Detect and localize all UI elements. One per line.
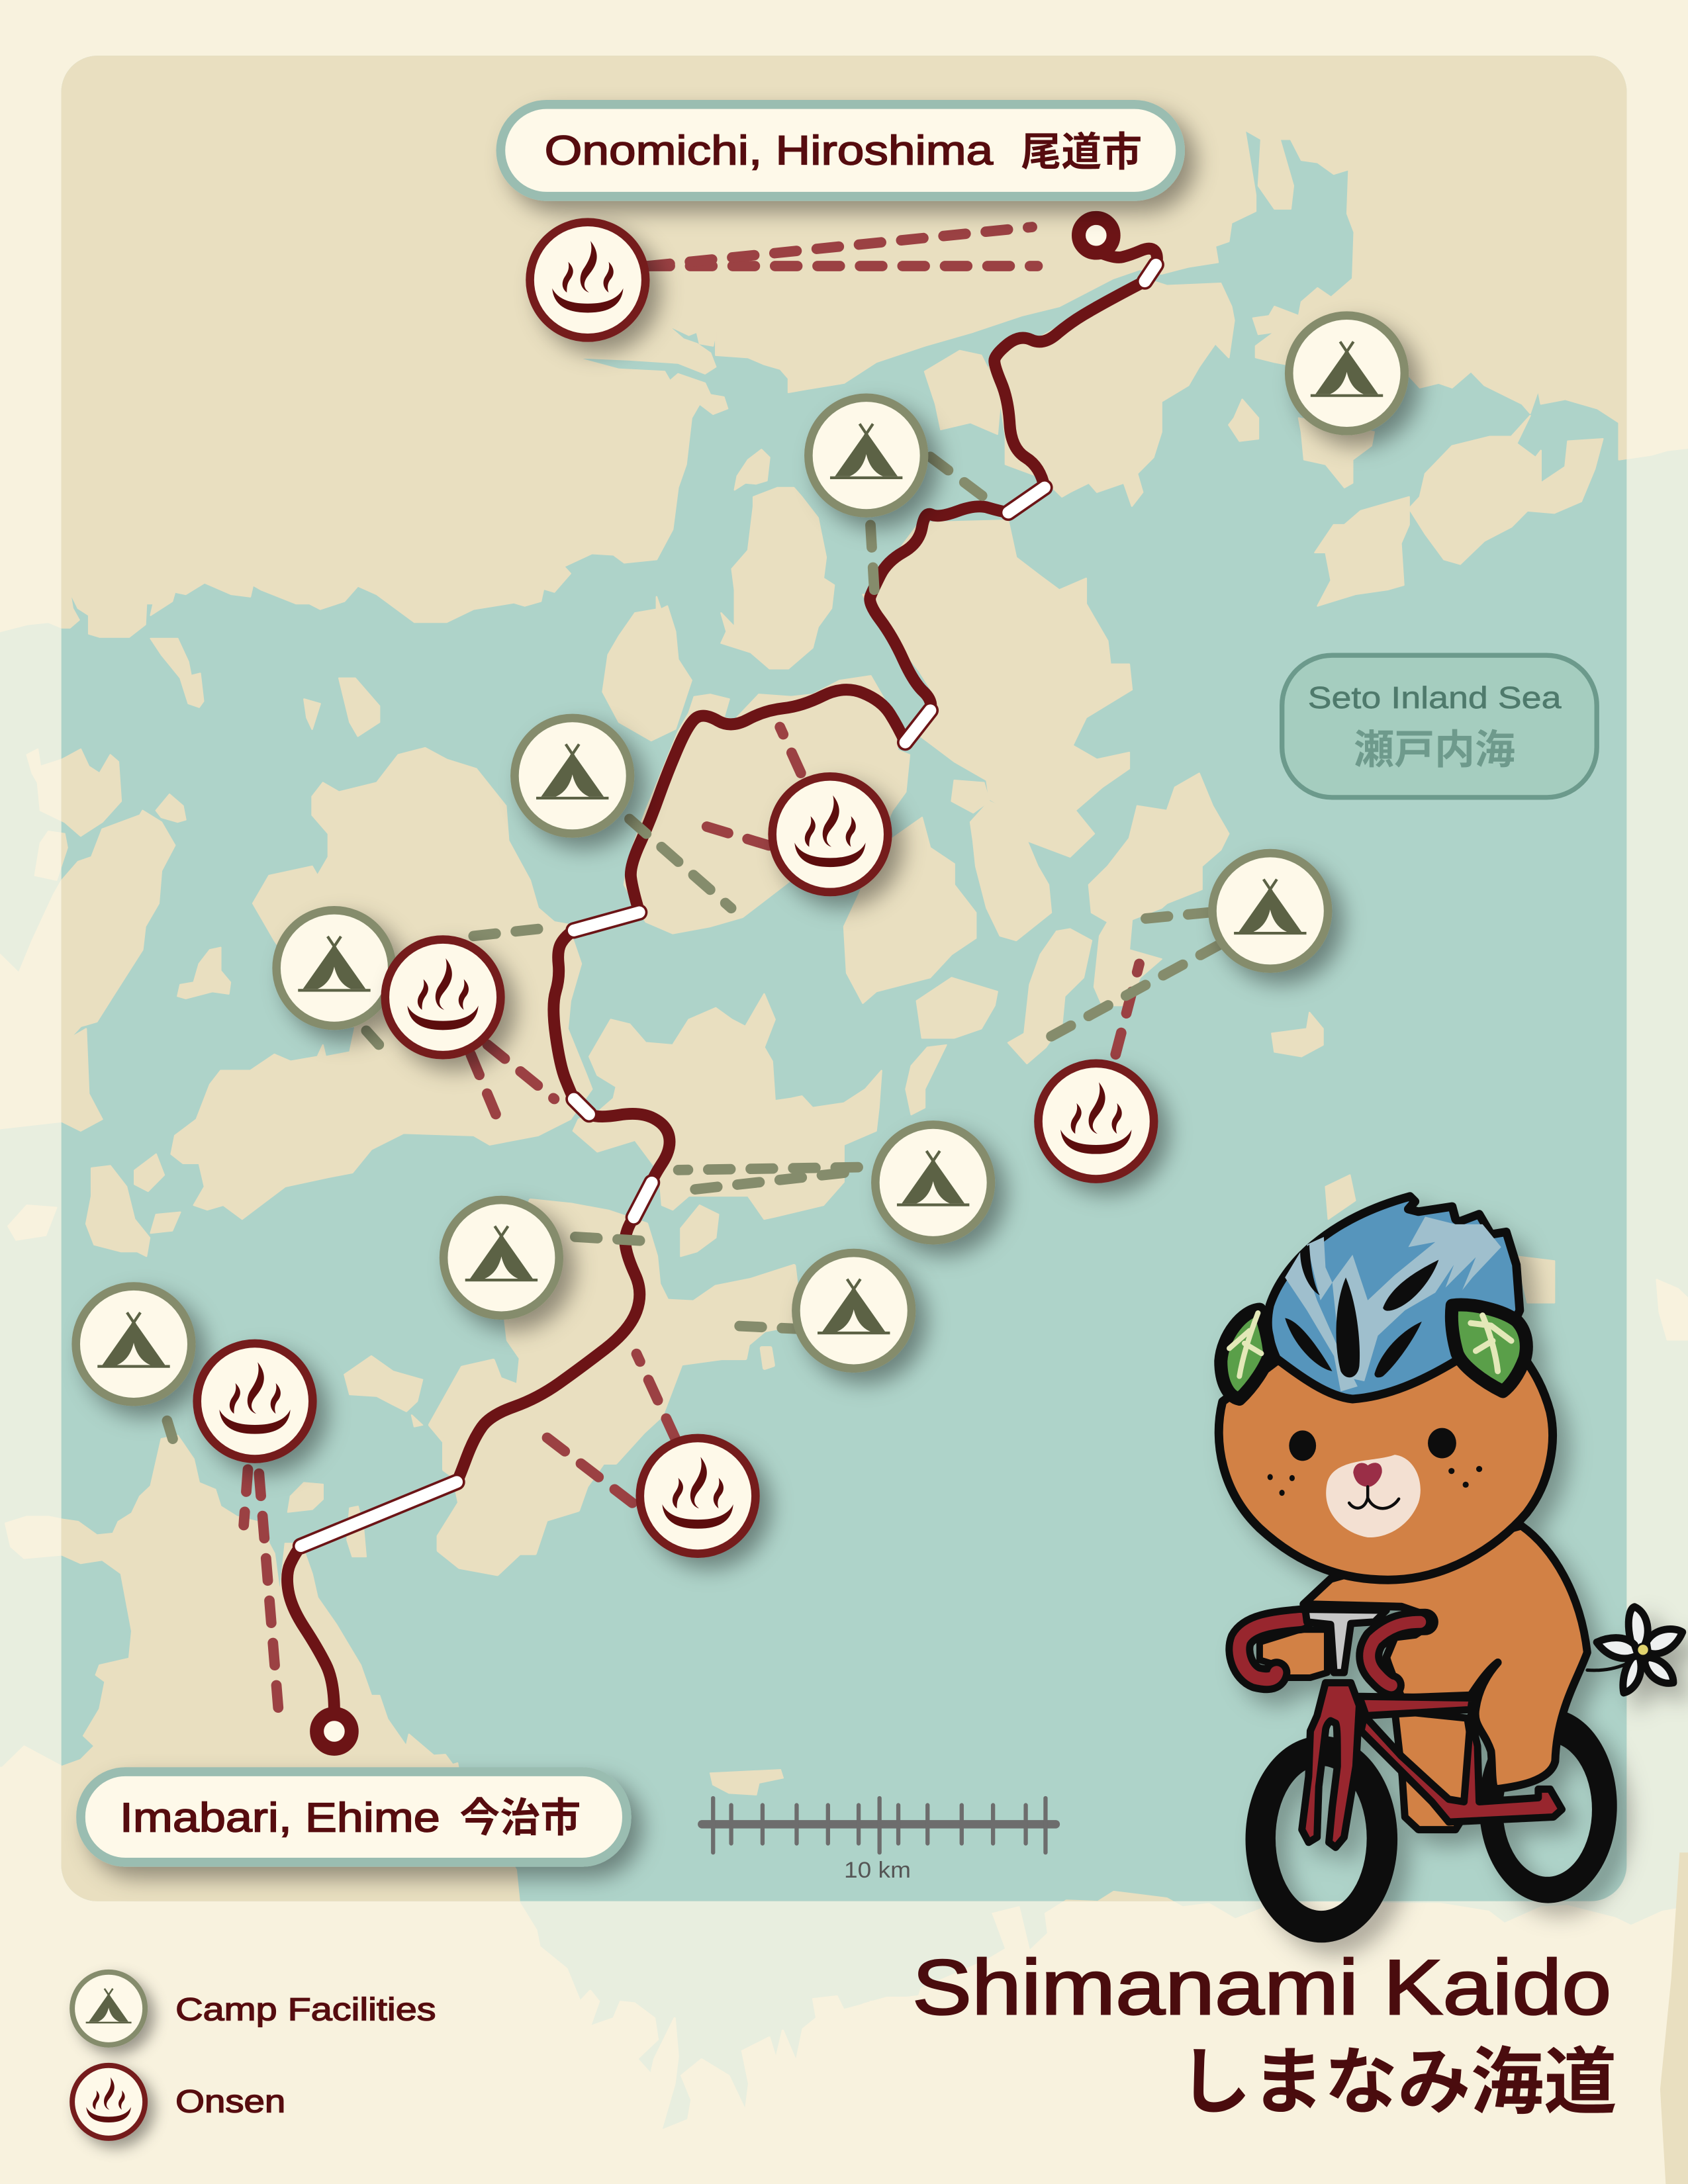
front wheel xyxy=(1245,1736,1397,1942)
label: Imabari: 今治市 xyxy=(459,1796,581,1841)
leaf right xyxy=(1452,1305,1526,1391)
icon: camp, west xyxy=(277,910,392,1026)
icon: onsen, Onomichi xyxy=(530,222,645,338)
route end marker: Imabari xyxy=(317,1714,352,1749)
label: Seto Inland Sea: 瀬戸内海 xyxy=(1354,727,1515,772)
icon: camp, far south west xyxy=(76,1287,191,1402)
legend xyxy=(72,1972,436,2138)
icon: camp, centre south xyxy=(444,1200,559,1316)
bicycle frame xyxy=(1359,1696,1562,1822)
dashed links: onsen xyxy=(244,227,1139,1712)
label: Onomichi: 尾道市 xyxy=(1021,129,1142,174)
label: Imabari xyxy=(81,1772,627,1862)
route start marker: Onomichi xyxy=(1079,218,1113,253)
bridges xyxy=(301,265,1156,1546)
route: cycling path xyxy=(287,249,1157,1712)
handlebar xyxy=(1239,1619,1425,1685)
flower tail xyxy=(1587,1607,1683,1693)
panel: map xyxy=(61,56,1627,1901)
hand xyxy=(1260,1629,1327,1678)
icon: camp, east islet xyxy=(1289,316,1405,431)
dashed links: camp xyxy=(167,457,1220,1439)
stem xyxy=(1305,1610,1386,1672)
icon: camp, centre north xyxy=(514,718,630,834)
icon: onsen, far south west xyxy=(197,1343,312,1459)
helmet xyxy=(1268,1197,1520,1399)
icon: onsen, west xyxy=(385,940,500,1055)
leaf left xyxy=(1221,1309,1270,1399)
mascot: orange bear on bicycle xyxy=(1219,1197,1683,1942)
icon: onsen, south xyxy=(640,1438,755,1554)
title: しまなみ海道 xyxy=(1178,2042,1617,2123)
icon: camp, centre xyxy=(875,1124,991,1240)
right edge land strip xyxy=(1660,1852,1688,2184)
label: Seto Inland Sea xyxy=(1282,655,1597,797)
lower body xyxy=(1395,1711,1479,1830)
legend: Camp Facilities xyxy=(175,1992,436,2028)
rear wheel xyxy=(1479,1709,1617,1903)
icon: onsen, east xyxy=(1039,1064,1154,1179)
legend icon: onsen xyxy=(72,2066,145,2138)
label: Onomichi: Onomichi, Hiroshima xyxy=(545,128,994,173)
label: Seto Inland Sea: Seto Inland Sea xyxy=(1308,680,1562,715)
scale bar xyxy=(702,1798,1056,1883)
label: Imabari: Imabari, Ehime xyxy=(120,1796,440,1841)
icon: camp, east xyxy=(1212,853,1328,969)
face xyxy=(1268,1428,1482,1537)
title xyxy=(912,1943,1617,2123)
icon: camp, north islet xyxy=(808,398,924,514)
scale bar: 10 km xyxy=(844,1858,911,1883)
title: Shimanami Kaido xyxy=(912,1943,1611,2030)
icon: camp, south east xyxy=(796,1253,912,1369)
icon: onsen, centre north xyxy=(773,776,888,892)
legend icon: camp xyxy=(72,1972,145,2045)
head xyxy=(1219,1361,1552,1580)
label: Onomichi xyxy=(500,105,1180,197)
fork over wheel xyxy=(1302,1683,1359,1847)
legend: Onsen xyxy=(175,2084,285,2120)
body xyxy=(1303,1525,1587,1789)
